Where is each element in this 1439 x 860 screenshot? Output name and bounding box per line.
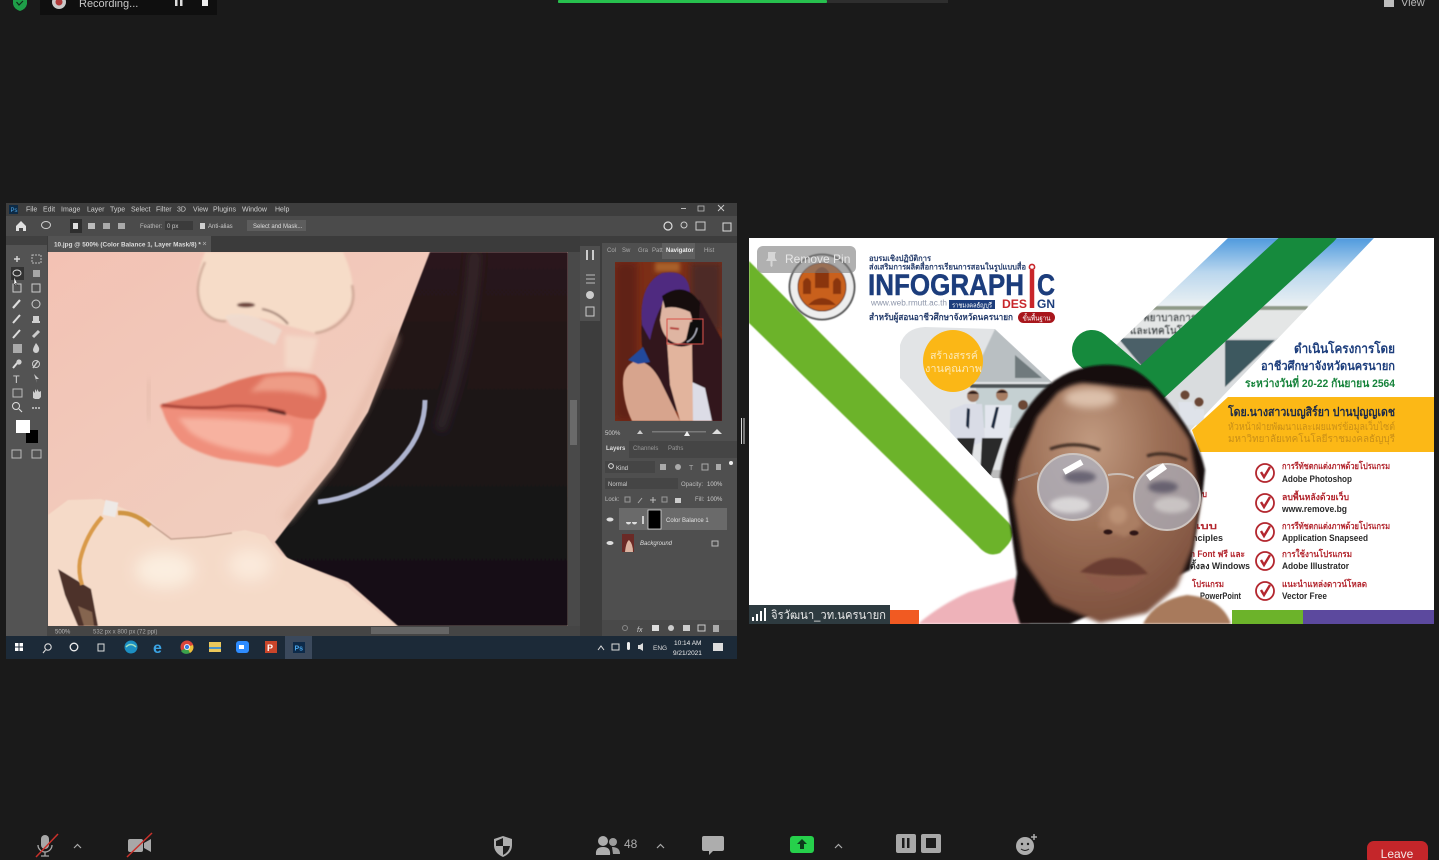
navigator panel: Patt	[652, 248, 663, 254]
vertical scroll bar	[568, 252, 580, 626]
slide building photo, right: และเทคโนโลยี	[1130, 324, 1194, 337]
jaw shading	[285, 335, 395, 520]
taskbar powerpoint icon: P	[267, 643, 273, 653]
slide title block: อบรมเชิงปฏิบัติการ	[869, 254, 932, 263]
taskbar chrome icon	[180, 640, 194, 654]
slide title block	[868, 254, 1055, 323]
panel: shared Photoshop window	[6, 203, 1434, 860]
icon: video off	[127, 833, 152, 857]
cheek fold shading	[148, 380, 150, 420]
nose	[1099, 499, 1142, 536]
photoshop menu bar: Type	[110, 206, 125, 214]
nose	[197, 252, 353, 345]
organizer text: อาชีวศึกษาจังหวัดนครนายก	[1261, 359, 1395, 373]
layers panel: Channels	[633, 446, 658, 452]
checklist, partly behind speaker: www.remove.bg	[1281, 504, 1347, 514]
screen share progress bar	[558, 0, 948, 3]
photoshop options bar: Anti-alias	[208, 224, 233, 230]
blend mode row: 100%	[707, 482, 723, 488]
photoshop menu bar: Select	[131, 206, 151, 214]
status bar: 532 px x 800 px (72 ppi)	[93, 630, 157, 636]
checklist, partly behind speaker: เว็บ	[1195, 487, 1207, 499]
panel: pinned participant video with slide background	[749, 227, 1434, 624]
layers panel: Paths	[668, 446, 683, 452]
taskbar photoshop icon: Ps	[294, 646, 303, 652]
name tag: จิรวัฒนา_วท.นครนายก	[771, 608, 886, 622]
remove pin button	[757, 246, 856, 273]
system tray: 10:14 AM	[674, 640, 701, 647]
photoshop options bar: Select and Mask...	[253, 224, 303, 230]
top status strip	[13, 0, 1425, 15]
face	[1013, 383, 1200, 623]
icon: green security shield	[13, 0, 27, 11]
taskbar powerpoint icon	[265, 641, 277, 653]
slide title block: C	[1037, 269, 1055, 302]
slide building photo, right	[1116, 238, 1374, 432]
navigator panel: Sw	[622, 248, 631, 254]
organizer text: ดำเนินโครงการโดย	[1294, 340, 1395, 356]
checklist, partly behind speaker: n Font ฟรี และ	[1190, 549, 1245, 559]
photoshop menu bar: Filter	[156, 206, 172, 214]
blend mode row: Normal	[608, 482, 627, 488]
system tray: ENG	[653, 645, 667, 652]
photoshop menu bar: Image	[61, 206, 81, 214]
photoshop menu bar: Edit	[43, 206, 55, 214]
forehead highlight	[1064, 388, 1116, 408]
yellow circle badge	[923, 330, 983, 392]
glasses	[1018, 454, 1200, 530]
yellow speaker banner: โดย.นางสาวเบญสิร์ยา ปานปุญญเดช	[1227, 404, 1395, 420]
photoshop menu bar: Ps	[10, 208, 18, 214]
system tray: 9/21/2021	[673, 650, 702, 657]
bottom colour strip	[890, 610, 1434, 624]
layers panel	[6, 441, 737, 659]
icon: share screen	[790, 836, 842, 853]
layer: color balance: Color Balance 1	[666, 518, 709, 524]
status bar	[47, 626, 580, 636]
background staff behind speaker	[1178, 390, 1204, 428]
checklist, partly behind speaker: PowerPoint	[1200, 591, 1241, 601]
photoshop options bar: 0 px	[167, 224, 178, 230]
taskbar cortana icon	[70, 643, 78, 651]
icon: muted microphone	[36, 834, 81, 857]
icon: pause and stop recording	[896, 834, 941, 853]
slide title block: www.web.rmutt.ac.th	[870, 298, 947, 308]
slide title block: ส่งเสริมการผลิตสื่อการเรียนการสอนในรูปแบบสื่อ	[869, 260, 1026, 272]
pink shirt	[918, 578, 1030, 624]
slide title block: GN	[1037, 299, 1055, 311]
yellow speaker banner: มหาวิทยาลัยเทคโนโลยีราชมงคลธัญบุรี	[1228, 432, 1396, 445]
checklist, partly behind speaker: แบบ	[1192, 521, 1217, 531]
taskbar file explorer icon	[209, 642, 221, 652]
layers panel: Layers	[606, 446, 626, 452]
student figures	[950, 389, 1028, 478]
icon: reactions	[1016, 834, 1037, 855]
photoshop menu bar: Help	[275, 206, 290, 214]
checklist, partly behind speaker	[1190, 460, 1390, 601]
yellow speaker banner	[1192, 397, 1434, 452]
windows taskbar	[6, 636, 737, 659]
taskbar edge icon	[124, 640, 138, 654]
layer filter row: T	[689, 465, 694, 472]
view button	[1384, 0, 1425, 9]
collapsed panel icons	[580, 236, 602, 636]
taskbar zoom icon	[236, 641, 249, 653]
leave button	[1367, 841, 1428, 860]
navigator panel: Hist	[704, 248, 715, 254]
checklist, partly behind speaker: Adobe Photoshop	[1282, 474, 1352, 484]
eyebrows	[1050, 445, 1187, 460]
name tag	[749, 605, 890, 624]
recording pill	[40, 0, 217, 15]
philtrum highlight	[286, 336, 316, 369]
yellow circle badge: สร้างสรรค์	[930, 350, 978, 362]
hand under chin	[1143, 595, 1231, 624]
slide title block: ขั้นพื้นฐาน	[1022, 312, 1051, 322]
navigator thumbnail of woman	[615, 262, 722, 421]
photoshop options bar: Feather:	[140, 224, 163, 230]
slide title block: INFOGRAPH	[868, 269, 1024, 302]
lips	[160, 372, 326, 467]
taskbar view icon	[98, 644, 104, 651]
checklist right column: แนะนำแหล่งดาวน์โหลด	[1282, 578, 1367, 589]
checklist, partly behind speaker: Adobe Illustrator	[1282, 561, 1349, 571]
checklist, partly behind speaker: โปรแกรม	[1191, 578, 1224, 589]
slide title block: สำหรับผู้สอนอาชีวศึกษาจังหวัดนครนายก	[869, 312, 1013, 323]
navigator panel: Navigator	[666, 248, 694, 254]
blend mode row	[605, 478, 723, 503]
taskbar internet explorer icon: e	[153, 640, 162, 657]
layer: background	[606, 534, 718, 552]
zoom meeting toolbar	[36, 833, 1428, 860]
navigator panel	[602, 236, 737, 441]
split-view drag handle	[742, 418, 744, 444]
slide title block: ราชมงคลธัญบุรี	[952, 302, 992, 310]
layer filter row	[605, 461, 733, 473]
icon: chat	[702, 836, 724, 855]
speaker figure	[918, 365, 1231, 624]
navigator panel: 500%	[605, 431, 621, 437]
icon: participants with count	[596, 836, 664, 855]
slide students photo, left	[900, 327, 1052, 478]
hair	[275, 252, 568, 626]
photoshop menu bar	[6, 203, 737, 216]
ring	[79, 500, 150, 585]
checklist, partly behind speaker: Vector Free	[1282, 591, 1327, 601]
hand	[48, 499, 395, 626]
blend mode row: 100%	[707, 497, 723, 503]
tools panel	[6, 236, 47, 636]
layer: color balance	[606, 508, 727, 530]
checklist right column: การรีทัชตกแต่งภาพด้วยโปรแกรม	[1282, 520, 1390, 531]
photoshop menu bar: Window	[242, 206, 268, 214]
organizer text: ระหว่างวันที่ 20-22 กันยายน 2564	[1245, 375, 1396, 390]
taskbar photoshop icon	[293, 642, 305, 653]
checklist, partly behind speaker: Application Snapseed	[1282, 533, 1368, 543]
checklist right column: ลบพื้นหลังด้วยเว็บ	[1282, 490, 1349, 502]
navigator panel: Col	[607, 248, 616, 254]
icon: security shield	[494, 836, 512, 857]
remove pin button: Remove Pin	[785, 252, 850, 266]
navigator panel: Gra	[638, 248, 649, 254]
checklist right column: การใช้งานโปรแกรม	[1282, 548, 1352, 559]
checklist, partly behind speaker: ตั้งลง Windows	[1190, 559, 1250, 571]
layer action icons	[602, 620, 737, 636]
photoshop menu bar: View	[193, 206, 209, 214]
taskbar search icon	[43, 644, 51, 653]
photoshop menu bar: 3D	[177, 206, 186, 214]
slide building photo, right: พยาบาลการ	[1143, 313, 1197, 324]
yellow speaker banner: หัวหน้าฝ่ายพัฒนาและเผยแพร่ข้อมูลเว็บไซต์	[1228, 419, 1395, 433]
bright green check stroke	[749, 261, 1013, 554]
document tab: 10.jpg @ 500% (Color Balance 1, Layer Mask/8) *	[54, 242, 201, 248]
layer: background: Background	[640, 541, 673, 547]
checklist, partly behind speaker: nciples	[1192, 533, 1223, 543]
check icons	[1256, 464, 1274, 600]
checklist right column	[1282, 460, 1390, 589]
photoshop menu bar: Layer	[87, 206, 105, 214]
status bar: 500%	[55, 630, 71, 636]
hair behind head	[1000, 365, 1205, 624]
icon: participants with count: 48	[624, 837, 638, 851]
photoshop menu bar: File	[26, 206, 37, 214]
slide title block: DES	[1002, 299, 1027, 311]
college seal	[788, 254, 856, 320]
checklist right column: การรีทัชตกแต่งภาพด้วยโปรแกรม	[1282, 460, 1390, 471]
organizer text	[1245, 340, 1396, 390]
blend mode row: Fill:	[695, 497, 705, 503]
dark green check stroke	[1092, 227, 1320, 392]
layer action icons: fx	[637, 627, 643, 634]
document tab	[6, 236, 580, 252]
mouth	[1080, 557, 1148, 576]
photo canvas: close-up of face	[48, 252, 568, 626]
blend mode row: Opacity:	[681, 482, 703, 488]
yellow circle badge: งานคุณภาพ	[925, 364, 982, 375]
earring	[318, 400, 425, 502]
blend mode row: Lock:	[605, 497, 620, 503]
photoshop options bar	[6, 216, 737, 236]
layer filter row: Kind	[616, 466, 628, 472]
tools panel: T	[13, 374, 20, 386]
windows start icon	[15, 643, 23, 651]
nostrils	[1104, 530, 1138, 536]
system tray	[598, 640, 723, 657]
photoshop menu bar: Plugins	[213, 206, 236, 214]
